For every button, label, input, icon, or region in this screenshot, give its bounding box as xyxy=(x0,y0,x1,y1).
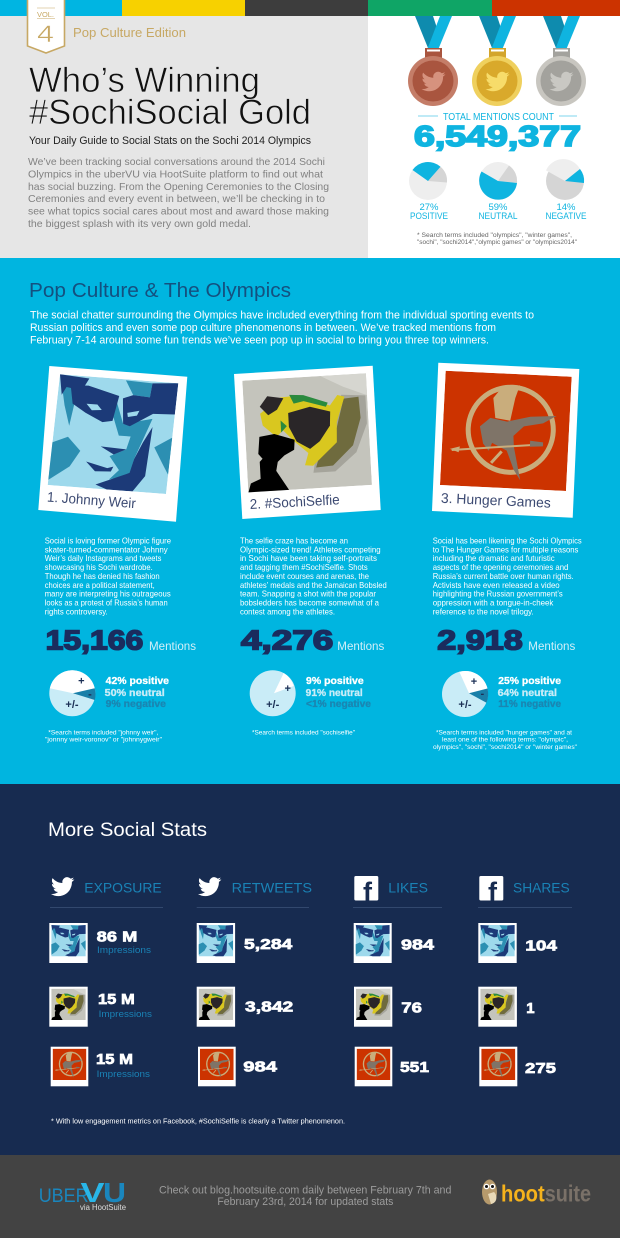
footnote: Hunger Games xyxy=(433,729,578,751)
logo: uberVU: U xyxy=(103,1177,126,1208)
column 3 text: reference to the novel trilogy. xyxy=(433,606,534,616)
search terms footnote: "sochi", "sochi2014","olympic games" or "olympics2014" xyxy=(417,239,578,246)
footer message: February 23rd, 2014 for updated stats xyxy=(217,1196,393,1208)
sentiment pie: Hunger Games: + xyxy=(471,676,477,688)
search terms footnote: * Search terms included "olympics", "winter games", xyxy=(417,232,572,239)
intro paragraph: Ceremonies and every event in between, we’ll be checking in to xyxy=(28,193,325,205)
column header: likes: f xyxy=(363,877,373,907)
shares values: 275 xyxy=(525,1060,556,1077)
colour stripe xyxy=(0,0,620,16)
column 3 text: Activists have even released a video xyxy=(433,580,560,590)
mentions: Johnny Weir: Mentions xyxy=(149,639,196,653)
badge: volume 4 xyxy=(28,0,64,53)
likes values: 76 xyxy=(401,999,422,1016)
column header: shares: f xyxy=(488,877,498,907)
shares thumbnails xyxy=(478,923,517,1086)
column 1 text: many are interpreting his outrageous xyxy=(45,589,171,599)
logo: hootsuite xyxy=(482,1180,591,1207)
total mentions label: TOTAL MENTIONS COUNT xyxy=(443,112,554,123)
column header: retweets: RETWEETS xyxy=(232,879,312,895)
footer message xyxy=(159,1184,451,1208)
polaroid: SochiSelfie xyxy=(234,366,381,519)
column 2 text: contest among the athletes. xyxy=(240,606,335,616)
exposure values xyxy=(96,929,152,1080)
footnote: Hunger Games: least one of the following terms: "olympic", xyxy=(442,737,568,744)
subtitle: Your Daily Guide to Social Stats on the Sochi 2014 Olympics xyxy=(29,135,312,147)
exposure values: 15 M xyxy=(96,1051,133,1068)
pie: positive 27% xyxy=(409,162,447,200)
mentions: Hunger Games: Mentions xyxy=(528,639,575,653)
background: header right panel xyxy=(368,0,620,259)
badge: volume 4: 4 xyxy=(37,21,54,48)
column 2 text: bobsledders has become somewhat of a xyxy=(240,598,379,608)
sentiment labels: SochiSelfie xyxy=(306,676,371,710)
sentiment labels: Hunger Games: 64% neutral xyxy=(498,688,557,699)
footnote: Hunger Games: olympics", "sochi", "sochi2014" or "winter games" xyxy=(433,744,578,751)
column 1 text: Though he has denied his fashion xyxy=(45,571,160,581)
sentiment labels: Hunger Games xyxy=(498,676,561,710)
column 1 text: choices are a political statement, xyxy=(45,580,155,590)
exposure values: 86 M xyxy=(97,929,137,946)
exposure values: Impressions xyxy=(99,1009,152,1020)
sentiment labels: SochiSelfie: 9% positive xyxy=(306,676,364,687)
mentions: Johnny Weir xyxy=(46,624,196,655)
mentions: SochiSelfie: 4,276 xyxy=(241,624,333,655)
pie labels: 59% xyxy=(488,202,508,213)
intro paragraph: see what topics social cares about most and award those making xyxy=(28,206,329,218)
column 3 text xyxy=(433,536,582,616)
background: header left panel xyxy=(0,0,368,259)
pie labels: 27% xyxy=(419,202,439,213)
pie: negative 14% xyxy=(546,159,584,200)
retweets values: 984 xyxy=(243,1059,278,1076)
intro paragraph xyxy=(28,156,329,230)
sentiment pie: Hunger Games: +/- xyxy=(458,699,472,711)
column 3 text: to The Hunger Games for multiple reasons xyxy=(433,544,578,554)
sentiment pie: Johnny Weir xyxy=(49,670,96,716)
column 1 text: Social is loving former Olympic figure xyxy=(45,536,171,546)
column 1 text: showcasing his Sochi wardrobe. xyxy=(45,562,153,572)
logo: uberVU xyxy=(39,1177,127,1212)
sentiment labels: SochiSelfie: 91% neutral xyxy=(306,688,363,699)
column 1 text: rights controversy. xyxy=(45,606,108,616)
pie labels: POSITIVE xyxy=(410,211,448,222)
pop culture intro: The social chatter surrounding the Olympics have included everything from the individual sporting events to xyxy=(30,310,534,322)
medal: bronze xyxy=(408,16,458,106)
column header: shares xyxy=(478,876,572,908)
logo: hootsuite: suite xyxy=(545,1181,591,1207)
sentiment pie: Johnny Weir: +/- xyxy=(65,699,79,711)
pop culture intro: Russian politics and even some pop culture phenomenons in between. We’ve tracked mentions from xyxy=(30,322,496,334)
edition label: Pop Culture Edition xyxy=(73,26,186,40)
footer message: Check out blog.hootsuite.com daily between February 7th and xyxy=(159,1184,451,1196)
column 2 text: The selfie craze has become an xyxy=(240,536,348,546)
total mentions number: 6,549,377 xyxy=(414,121,581,153)
retweets values: 5,284 xyxy=(244,936,293,953)
facebook note: * With low engagement metrics on Facebook, #SochiSelfie is clearly a Twitter phenomenon. xyxy=(51,1116,345,1126)
retweets values xyxy=(243,936,293,1076)
title xyxy=(29,61,311,132)
column 2 text: team. Snapping a shot with the popular xyxy=(240,589,376,599)
column 1 text: Weir’s daily Instagrams and tweets xyxy=(45,553,161,563)
column header: shares: SHARES xyxy=(513,879,570,895)
sentiment pie: SochiSelfie xyxy=(250,670,296,716)
column 3 text: including the dramatic and futuristic xyxy=(433,553,555,563)
more social stats heading: More Social Stats xyxy=(48,820,207,841)
medal: gold xyxy=(472,16,522,106)
exposure values: 15 M xyxy=(98,991,135,1008)
retweets values: 3,842 xyxy=(245,999,293,1016)
shares values: 104 xyxy=(525,938,558,955)
sentiment pie: Hunger Games xyxy=(442,671,488,717)
likes values xyxy=(400,936,435,1076)
column 2 text: Olympic-sized trend! Athletes competing xyxy=(240,544,381,554)
shares values xyxy=(525,938,558,1077)
footnote: SochiSelfie: *Search terms included "sochiselfie" xyxy=(252,729,356,736)
intro paragraph: has social buzzing. From the Opening Ceremonies to the Closing xyxy=(28,181,329,193)
pop culture intro: February 7-14 around some fun trends we’ve seen pop up in social to bring you three top winners. xyxy=(30,334,489,346)
footnote: Hunger Games: *Search terms included "hunger games" and at xyxy=(436,729,572,736)
column header: likes: LIKES xyxy=(388,879,428,895)
column 3 text: oppression with a tongue-in-cheek xyxy=(433,598,554,608)
sentiment labels: Johnny Weir: 50% neutral xyxy=(105,688,165,699)
column 2 text xyxy=(240,536,387,616)
column 2 text: and tagging them #SochiSelfie. Shots xyxy=(240,562,368,572)
sentiment labels: SochiSelfie: <1% negative xyxy=(306,699,371,710)
badge: volume 4: VOL. xyxy=(37,10,54,19)
logo: uberVU: UBER xyxy=(39,1186,89,1207)
pie labels: NEUTRAL xyxy=(478,211,518,222)
sentiment pie: SochiSelfie: + xyxy=(284,683,291,695)
title: #SochiSocial Gold xyxy=(29,93,311,132)
logo: uberVU: V xyxy=(80,1177,105,1208)
pop culture heading: Pop Culture & The Olympics xyxy=(29,279,291,302)
column header: exposure: EXPOSURE xyxy=(84,879,162,895)
column 2 text: athletes’ medals and the Jamaican Bobsled xyxy=(240,580,387,590)
intro paragraph: the biggest splash with its very own gold medal. xyxy=(28,218,251,230)
retweets thumbnails xyxy=(197,923,236,1086)
shares values: 1 xyxy=(526,1000,535,1017)
likes values: 551 xyxy=(400,1059,429,1076)
polaroid: SochiSelfie: 2. #SochiSelfie xyxy=(249,491,340,512)
footnote: Johnny Weir xyxy=(45,729,163,744)
pop culture intro xyxy=(30,310,534,346)
column header: likes xyxy=(353,876,442,908)
polaroid: Johnny Weir xyxy=(38,366,187,522)
sentiment labels: Hunger Games: 25% positive xyxy=(498,676,561,687)
sentiment labels: Hunger Games: 11% negative xyxy=(498,699,561,710)
search terms footnote xyxy=(417,232,578,246)
pie labels xyxy=(410,202,586,222)
column 1 text: looks as a protest of Russia’s human xyxy=(45,598,168,608)
sentiment pie: Hunger Games: - xyxy=(480,688,484,700)
pie labels: 14% xyxy=(556,202,576,213)
polaroid: Hunger Games xyxy=(432,363,579,518)
column 1 text xyxy=(45,536,171,616)
pie labels: NEGATIVE xyxy=(546,211,586,222)
logo: hootsuite: hoot xyxy=(501,1181,545,1207)
sentiment pie: SochiSelfie: +/- xyxy=(266,699,280,711)
column 1 text: skater-turned-commentator Johnny xyxy=(45,544,169,554)
sentiment labels: Johnny Weir xyxy=(105,676,169,710)
footnote: Johnny Weir: "jonnny weir-voronov" or "johnnygweir" xyxy=(45,737,163,744)
mentions: SochiSelfie xyxy=(241,624,384,655)
column 3 text: aspects of the opening ceremonies and xyxy=(433,562,569,572)
column 3 text: Social has been likening the Sochi Olympics xyxy=(433,536,582,546)
exposure thumbnails xyxy=(49,923,88,1086)
column 2 text: include event courses and arenas, the xyxy=(240,571,369,581)
sentiment pie: Johnny Weir: + xyxy=(78,676,85,688)
exposure values: Impressions xyxy=(97,1069,150,1080)
intro paragraph: Olympics in the uberVU via HootSuite platform to find out what xyxy=(28,168,323,180)
mentions: SochiSelfie: Mentions xyxy=(337,639,384,653)
mentions: Johnny Weir: 15,166 xyxy=(46,624,143,655)
title: Who’s Winning xyxy=(29,61,260,100)
likes thumbnails xyxy=(354,923,392,1086)
pie: neutral 59% xyxy=(479,162,517,200)
sentiment labels: Johnny Weir: 9% negative xyxy=(106,699,166,710)
sentiment pie: Johnny Weir: - xyxy=(88,688,92,700)
logo: uberVU: via HootSuite xyxy=(80,1203,127,1212)
column 2 text: in Sochi have been taking self-portraits xyxy=(240,553,377,563)
polaroid: Hunger Games: 3. Hunger Games xyxy=(441,490,551,511)
likes values: 984 xyxy=(401,936,435,953)
column 3 text: Russia’s current battle over human rights. xyxy=(433,571,574,581)
panel: footer xyxy=(0,1155,620,1238)
sentiment labels: Johnny Weir: 42% positive xyxy=(106,676,169,687)
mentions: Hunger Games xyxy=(437,624,575,655)
column 3 text: highlighting the Russian government’s xyxy=(433,589,563,599)
column header: retweets xyxy=(197,877,312,908)
polaroid: Johnny Weir: 1. Johnny Weir xyxy=(46,489,137,511)
column header: exposure xyxy=(50,877,163,908)
exposure values: Impressions xyxy=(97,945,151,956)
footnote: Johnny Weir: *Search terms included "johnny weir", xyxy=(48,729,158,736)
mentions: Hunger Games: 2,918 xyxy=(437,624,523,655)
medal: silver xyxy=(536,16,586,106)
panel: more social stats xyxy=(0,784,620,1155)
intro paragraph: We’ve been tracking social conversations around the 2014 Sochi xyxy=(28,156,325,168)
panel: pop culture xyxy=(0,258,620,784)
